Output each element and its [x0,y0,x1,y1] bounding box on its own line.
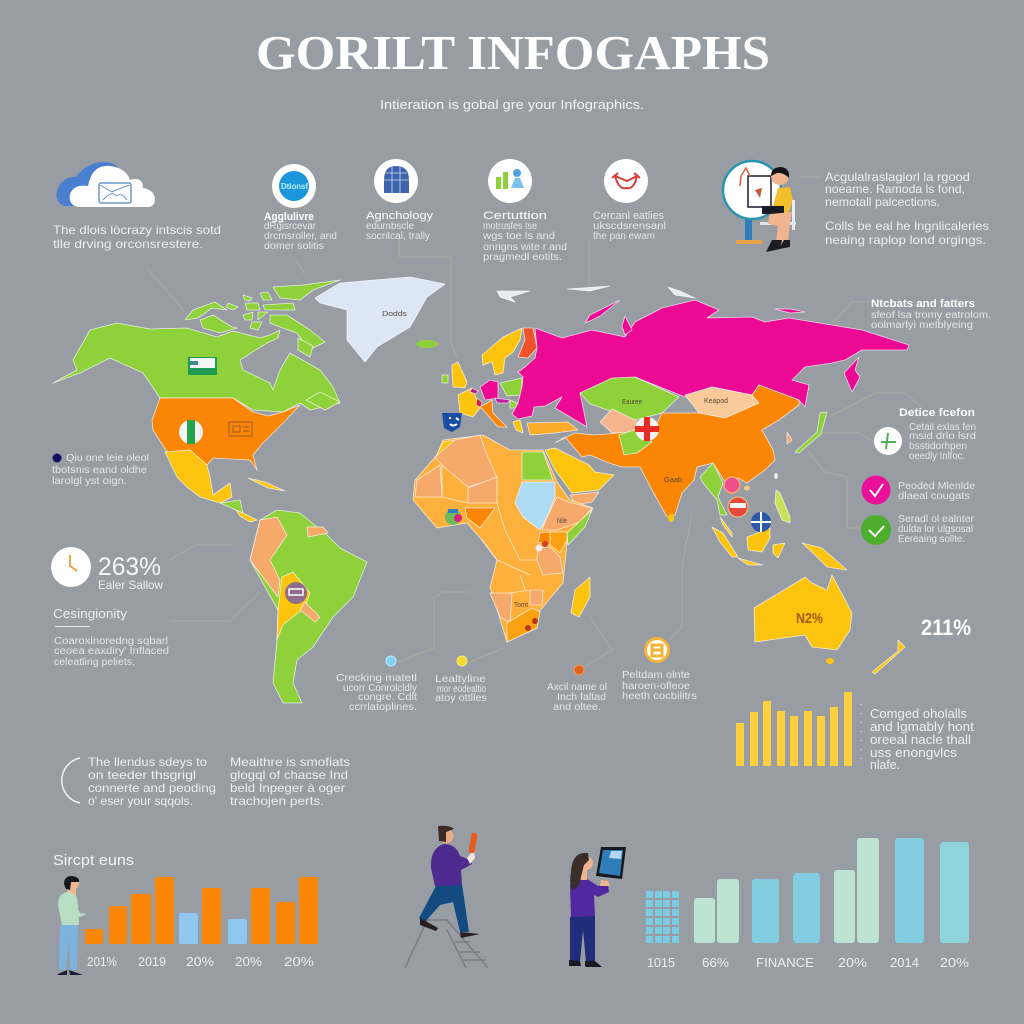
text block: top right: Acgulalraslagiorl la rgood [825,170,970,184]
illustration: person by orange chart [58,876,87,975]
text block: Certuttion: wgs toe ls and [482,231,555,242]
text block: lendus with arc [62,755,216,808]
text block: Seradl: dulda lor ulgsosal [898,524,973,535]
USA badge [179,420,203,444]
chart labels: orange bars: 2019 [138,955,166,969]
text block: Cesingionity: Cesingionity [53,606,128,621]
stat: 263% with clock: 263% [98,553,161,581]
Arctic islands [497,286,695,302]
text block: Peoded [898,481,975,502]
text block: Certuttion: Certuttion [483,210,547,222]
text block: Cesingionity [53,606,169,668]
chart: teal and mint bars [694,838,969,943]
text block: Detice fcefon: Cetail exlas fen [909,422,976,433]
map place labels: Keapod [704,398,728,405]
callout: Lealtyline: mor eodealtio [437,684,486,695]
Central Asia [600,409,645,433]
Turkey [527,422,578,435]
Europe [442,328,537,433]
cloud caption: tlle drving orconsrestere. [53,237,203,251]
text block: top right [825,170,989,247]
text block: Certuttion: onrigns wite r and [483,242,567,253]
North America: Canada and Alaska [53,280,340,412]
text block: Cesingionity: celeatling peliets. [54,657,135,668]
map place labels [382,311,823,627]
chart labels: teal bars: 2014 [890,955,919,970]
text block: Cercanl eatlies [593,210,666,242]
text block: Cercanl eatlies: ukscdsrensanl [593,221,666,232]
callout: Axcil name: Axcil name ol [547,682,607,693]
stat: 211%: 211% [921,615,971,640]
text block: Agnchology: Agnchology [366,210,434,222]
title: GORILT INFOGAPHS [256,25,770,80]
callout: Axcil name [547,665,607,713]
cloud icon [56,162,155,207]
text block: Detice fcefon: Detice fcefon [899,407,975,419]
text block: Agglulivre [264,211,337,252]
text block: Comged: Comged oholalls [870,707,967,721]
chart labels: orange bars [87,955,314,969]
text block: Peoded: Peoded Mlenlde [898,481,975,492]
Russia [512,300,909,427]
text block: lendus with arc: on teeder thsgrigl [88,768,196,782]
text block: Meaithre: Meaithre is smofiats [230,755,350,769]
chart: grid pictogram [646,891,679,943]
chart labels: teal bars: FINANCE [756,955,814,970]
icon: white plus [874,427,902,455]
callout: navy dot note: Qiu one leie oleol [66,452,149,464]
text block: Ntcbats: Ntcbats and fatters [871,298,975,310]
chart labels: orange bars: 201% [87,955,117,969]
callout: Axcil name: Inch faltad [557,692,606,703]
text block: Agnchology: socritcal, trally [366,231,430,242]
United States [152,398,300,470]
Madagascar [571,577,590,617]
text block: Agglulivre: domer solitis [264,241,324,252]
text block: Ntcbats: oolmarlyi melblyeing [871,320,973,331]
text block: Certuttion [482,210,567,263]
South America badge [285,582,307,604]
callout: Crecking matetl: ccrrlatoplines. [349,702,417,713]
text block: top right: neaing raplop lond orgings. [825,233,986,247]
text block: Certuttion: pragmedl eotits. [483,252,562,263]
text block: Cesingionity: Coaroxinoredng sqbarl [54,636,168,647]
text block: Ntcbats: sfeof lsa tromy eatrolom. [871,310,991,321]
map place labels: Tomt [514,602,528,609]
chart heading: Sircpt euns [53,852,134,869]
Afghanistan [619,430,652,455]
callout: navy dot note: larolgl yst oign. [52,475,127,487]
callout: Peltdam: haroen-ofleoe [622,681,690,692]
callout: Crecking matetl: ucorr Conrolcldly [343,683,417,694]
Iceland [416,340,438,348]
text block: top right: nemotall palcections. [825,195,940,209]
text block: Agglulivre: dRgisrcevar [264,221,317,232]
Africa [413,435,593,642]
red cross badge [635,417,659,441]
chart labels: teal bars [647,955,969,970]
chart labels: teal bars: 20% [838,955,867,970]
icon: blue circle [272,164,316,208]
illustration: person at display [723,161,796,252]
Kazakhstan [580,377,679,420]
USA box badge [229,422,252,436]
Mongolia [685,387,759,418]
text block: Cercanl eatlies: the pan ewam [593,231,655,242]
icon: blue circle: Dtlonsf [281,182,308,191]
icon: globe dome [374,159,418,203]
text block: Cercanl eatlies: Cercanl eatlies [593,210,664,222]
text block: Comged [870,707,975,772]
text block: lendus with arc: o' eser your sqqols. [88,794,193,808]
text block: Detice fcefon [899,407,976,462]
text block: Seradl: Seradl ol ealnter [898,514,975,525]
text block: Certuttion: motrusfes tse [483,221,537,232]
map place labels: Gaab [664,477,682,484]
illustration: person on ladder [405,826,488,968]
chart: orange and blue bars [85,877,318,944]
text block: Agnchology [366,210,434,242]
map badges [179,357,771,631]
chart labels: teal bars: 66% [702,955,729,970]
text block: Ntcbats [871,298,991,331]
text block: Seradl: Eereaing sollte. [898,534,965,545]
icon: red symbol [604,159,648,203]
text block: lendus with arc: The llendus sdeys to [88,755,207,769]
text block: Meaithre [230,755,350,808]
chart labels: orange bars: 20% [284,955,314,969]
text block: Meaithre: glogql of chacse Ind [230,768,348,782]
South America [250,510,367,703]
callout: Crecking matetl: congre. Cdlt [358,692,417,703]
stat: 263% with clock: Ealer Sallow [98,578,163,592]
text block: Agglulivre: drcmsroller, and [264,231,337,242]
illustration: person with tablet [569,847,626,967]
text block: Comged: nlafe. [870,758,900,772]
cloud caption: The dlois lòcrazy intscis sotd [53,223,221,237]
subtitle: Intieration is gobal gre your Infographics. [380,97,644,112]
callout: navy dot note: tbotsnis eand oldhe [52,464,147,476]
callout: Peltdam [622,637,697,702]
chart: yellow bars [736,692,852,766]
callout: Lealtyline: atoy ottlles [435,693,487,704]
callout: Peltdam: heeth cocbilitrs [622,691,697,702]
text block: Cesingionity: ceoea eaxdiry' Inflaced [54,646,169,657]
text block: Comged: uss enongvlcs [870,746,957,760]
text block: Peoded: dlaeal cougats [898,491,970,502]
Greenland [315,277,445,362]
connector lines [147,177,922,667]
icon: magenta check [862,476,890,504]
text block: Detice fcefon: msid drlo lsrd [909,431,976,442]
text block: Detice fcefon: bsstidorhpen [909,441,967,452]
chart labels: teal bars: 1015 [647,955,675,970]
callout: Axcil name: and oltee. [553,702,601,713]
stat: 263% with clock [51,547,163,592]
text block: Agnchology: edumbscle [366,221,414,232]
text block: top right: noeame. Ramoda ls fond, [825,182,965,196]
text block: Meaithre: beld Inpeger à oger [230,781,345,795]
chart labels: orange bars: 20% [186,955,214,969]
West Africa badge [445,509,462,525]
Arabian Peninsula [545,448,614,493]
callout: Lealtyline [435,656,487,704]
callout: Peltdam: Peltdam olnte [622,670,690,681]
text block: Comged: oreeal nacle thall [870,733,971,747]
text block: top right: Colls be eal he lngnlicaleries [825,219,989,233]
South Africa marks [525,618,538,631]
chart labels: orange bars: 20% [235,955,262,969]
chart labels: teal bars: 20% [940,955,969,970]
text block: Meaithre: trachojen perts. [230,794,324,808]
text block: lendus with arc: connerte and peoding [88,781,216,795]
map place labels: Dodds [382,311,408,318]
East Africa badge [536,541,548,552]
cloud caption [53,223,221,251]
text block: Seradl [898,514,975,545]
callout: navy dot note [52,452,149,487]
map place labels: Nile [557,518,567,525]
world map [53,277,909,703]
shield badge [442,413,462,432]
East and Southeast Asia [668,412,847,570]
map place labels: N2% [796,610,823,627]
text block: Detice fcefon: oeedly Inlfoc. [909,451,965,462]
New Zealand [872,640,905,674]
China, India and Iran [555,385,799,517]
southeast Asia badges [724,477,771,532]
Australia [754,575,852,664]
map place labels: Eauree [622,399,642,406]
text block: Agglulivre: Agglulivre [264,211,314,223]
Canada flag badge [188,357,217,375]
Mexico and Central America [165,450,285,522]
text block: Comged: and Igmably hont [870,720,975,734]
callout: Crecking matetl: Crecking matetl [336,672,417,684]
callout: Lealtyline: Lealtyline [435,673,486,685]
callout: Crecking matetl [336,656,417,713]
icon: bars and person [488,159,532,203]
icon: green check [861,515,891,545]
